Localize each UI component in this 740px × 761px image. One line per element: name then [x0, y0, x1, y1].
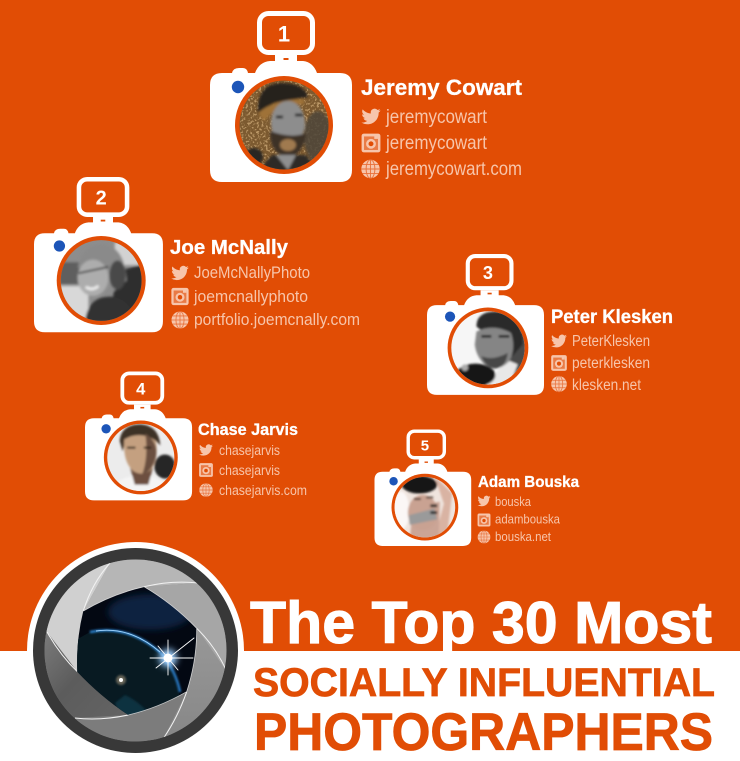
portrait: Chase Jarvis [106, 423, 175, 492]
website: klesken.net [572, 377, 642, 394]
name: Joe McNally [170, 236, 289, 259]
portrait: Adam Bouska [393, 476, 456, 538]
photographer 3: Peter Klesken [427, 256, 673, 395]
website: bouska.net [495, 530, 551, 544]
atmosphere glow [90, 630, 180, 692]
portrait: Joe McNally [59, 239, 144, 322]
twitter icon [199, 444, 213, 456]
camera 4 with rank and portrait [85, 373, 192, 500]
photographer 4: Chase Jarvis [85, 373, 307, 500]
instagram icon [171, 288, 189, 305]
website: portfolio.joemcnally.com [194, 310, 360, 329]
portrait: Jeremy Cowart [238, 79, 332, 171]
name: Jeremy Cowart [361, 75, 523, 100]
twitter handle: JoeMcNallyPhoto [194, 263, 310, 282]
photographer 1: Jeremy Cowart [210, 14, 523, 182]
rank number 2: 2 [96, 188, 107, 210]
twitter icon [478, 496, 490, 506]
camera 2 with rank and portrait [34, 179, 163, 332]
website icon [171, 311, 189, 329]
title line 3: PHOTOGRAPHERS [254, 703, 713, 761]
photographer 5: Adam Bouska [374, 431, 579, 546]
instagram icon [551, 355, 567, 371]
rank number 5: 5 [421, 437, 429, 454]
twitter handle: bouska [495, 495, 531, 509]
twitter handle: chasejarvis [219, 443, 280, 458]
name: Adam Bouska [478, 474, 579, 491]
twitter icon [551, 335, 567, 347]
instagram handle: chasejarvis [219, 463, 280, 478]
lens white outer ring [27, 542, 244, 759]
instagram handle: adambouska [495, 512, 560, 526]
instagram handle: joemcnallyphoto [193, 287, 308, 306]
aperture blades [44, 560, 226, 742]
camera 3 with rank and portrait [427, 256, 544, 395]
website icon [361, 160, 380, 178]
title line 1: The Top 30 Most [250, 590, 712, 656]
twitter handle: PeterKlesken [572, 333, 650, 350]
camera 1 with rank and portrait [210, 14, 352, 182]
lens dark ring [33, 548, 238, 753]
rank number 4: 4 [136, 379, 146, 398]
website: chasejarvis.com [219, 483, 307, 498]
website icon [478, 531, 490, 543]
lens opening rim highlight [83, 587, 197, 715]
small city light [116, 675, 126, 685]
twitter handle: jeremycowart [385, 107, 488, 128]
lens aperture emblem [27, 542, 244, 753]
white footer band [0, 651, 740, 761]
instagram icon [478, 514, 490, 526]
instagram handle: peterklesken [572, 355, 650, 372]
instagram handle: jeremycowart [385, 133, 488, 154]
rank number 3: 3 [483, 263, 493, 283]
starburst [150, 638, 194, 675]
portrait: Peter Klesken [450, 310, 526, 387]
lens opening with earth and starburst [77, 586, 197, 715]
name: Chase Jarvis [198, 421, 298, 439]
instagram icon [199, 463, 213, 477]
website: jeremycowart.com [385, 159, 522, 180]
title line 2: SOCIALLY INFLUENTIAL [253, 661, 715, 705]
twitter icon [171, 266, 189, 280]
camera 5 with rank and portrait [374, 431, 471, 546]
name: Peter Klesken [551, 307, 673, 328]
photographer 2: Joe McNally [34, 179, 360, 332]
website icon [551, 376, 567, 392]
instagram icon [362, 134, 380, 152]
website icon [199, 483, 213, 497]
earth [77, 632, 179, 715]
rank number 1: 1 [278, 22, 290, 46]
twitter icon [361, 109, 381, 124]
